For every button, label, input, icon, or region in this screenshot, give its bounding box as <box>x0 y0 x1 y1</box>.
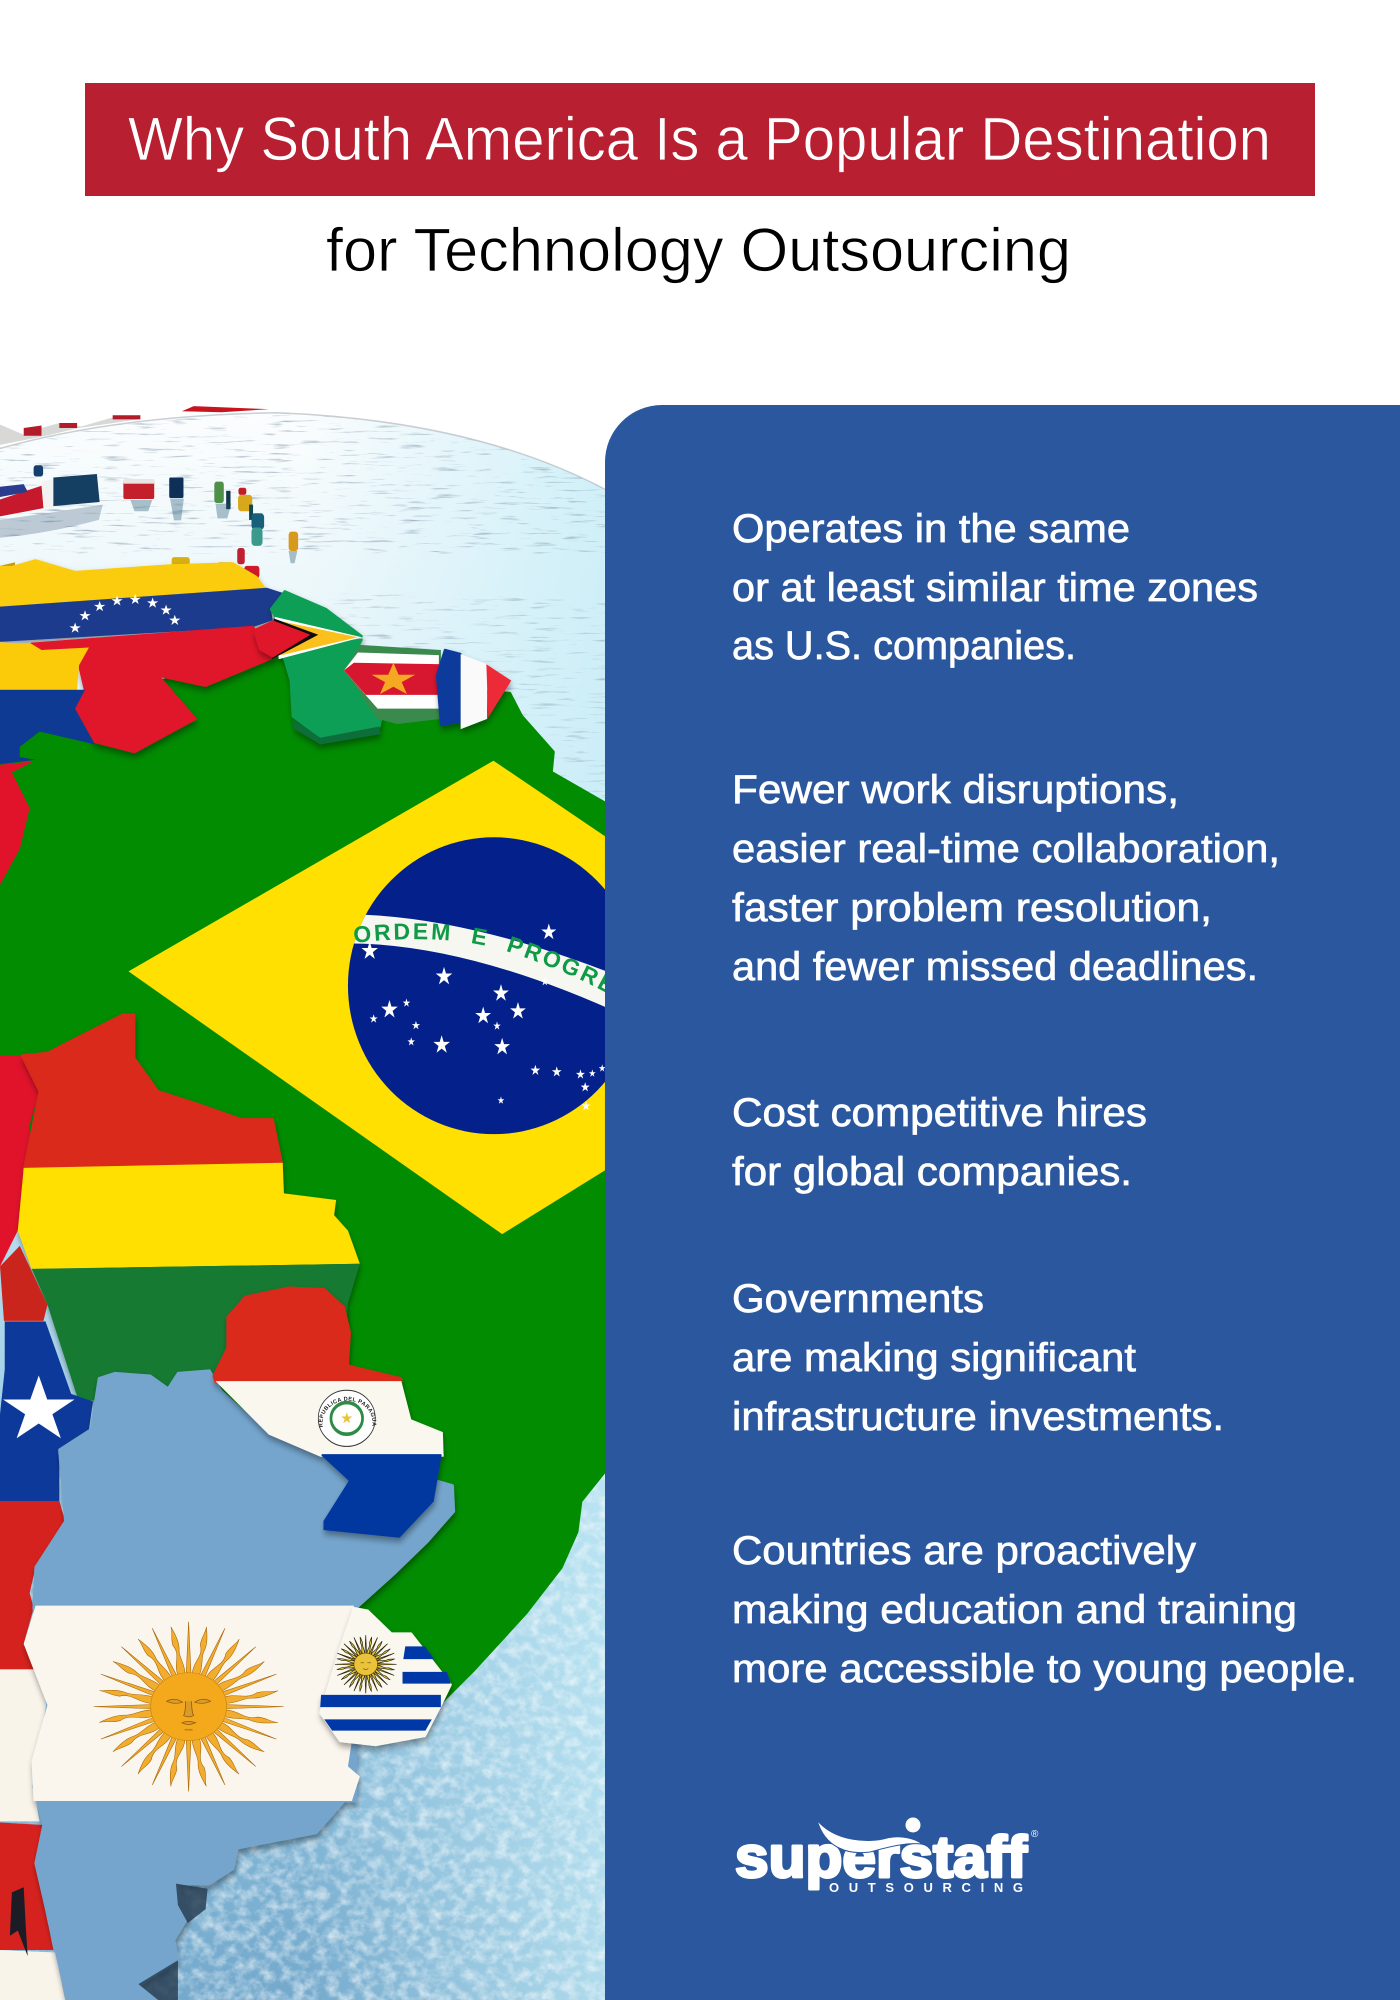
Paraguay coat of arms <box>318 1390 375 1446</box>
benefit 5: education: Countries are proactively <box>732 1529 1196 1573</box>
Caribbean islands <box>0 465 298 579</box>
Paraguay seal lettering: REPUBLICA DEL PARAGUAY <box>318 1396 376 1428</box>
benefit 5: education: making education and training <box>732 1588 1297 1632</box>
benefit 3: cost <box>732 1091 1147 1194</box>
benefit 4: infrastructure: infrastructure investments. <box>732 1395 1224 1439</box>
Patagonian coast rocks <box>138 1884 208 2000</box>
benefit 5: education <box>732 1529 1357 1691</box>
benefit 1: time zones <box>732 507 1258 668</box>
benefit 2: collaboration: Fewer work disruptions, <box>732 768 1179 812</box>
subtitle: for Technology Outsourcing <box>326 216 1071 284</box>
Argentina <box>24 1371 454 2000</box>
Brazil flag diamond <box>129 761 605 1234</box>
logo: Superstaff Outsourcing: OUTSOURCING <box>829 1880 1023 1895</box>
logo: Superstaff Outsourcing: ® <box>1031 1829 1039 1840</box>
Brazil flag blue globe <box>348 837 605 1134</box>
Uruguay sun <box>335 1635 397 1693</box>
Guyana <box>253 591 382 744</box>
French Guiana <box>437 650 511 729</box>
benefit 2: collaboration: easier real-time collaboration, <box>732 827 1280 871</box>
Bolivia <box>18 1015 360 1403</box>
benefit 4: infrastructure: are making significant <box>732 1336 1136 1380</box>
Argentina sun <box>94 1622 284 1791</box>
logo: Superstaff Outsourcing: superstaff <box>735 1825 1028 1890</box>
benefit 1: time zones: or at least similar time zones <box>732 566 1258 610</box>
benefit 2: collaboration <box>732 768 1280 989</box>
globe rim edge <box>0 406 605 489</box>
Colombia <box>0 642 95 885</box>
benefit 4: infrastructure <box>732 1277 1224 1439</box>
Argentina white band <box>24 1606 360 1801</box>
Chile <box>0 1246 93 2000</box>
benefit 3: cost: for global companies. <box>732 1150 1132 1194</box>
ocean globe <box>0 410 605 2000</box>
Paraguay <box>214 1288 444 1537</box>
panel: benefits <box>605 405 1400 2000</box>
benefit 5: education: more accessible to young people. <box>732 1647 1357 1691</box>
benefit 2: collaboration: and fewer missed deadlines. <box>732 945 1258 989</box>
title banner: Why South America Is a Popular Destination <box>128 105 1271 173</box>
Peru <box>0 1056 40 1266</box>
map: South America flags on a globe <box>0 406 645 2000</box>
Venezuela <box>0 559 283 752</box>
benefit 4: infrastructure: Governments <box>732 1277 984 1321</box>
benefit 3: cost: Cost competitive hires <box>732 1091 1147 1135</box>
Brazil landmass <box>0 645 605 1705</box>
Suriname <box>344 645 445 724</box>
title banner <box>85 83 1315 196</box>
benefit 1: time zones: as U.S. companies. <box>732 624 1076 668</box>
benefit 1: time zones: Operates in the same <box>732 507 1130 551</box>
Uruguay <box>320 1608 451 1745</box>
benefit 2: collaboration: faster problem resolution, <box>732 886 1212 930</box>
